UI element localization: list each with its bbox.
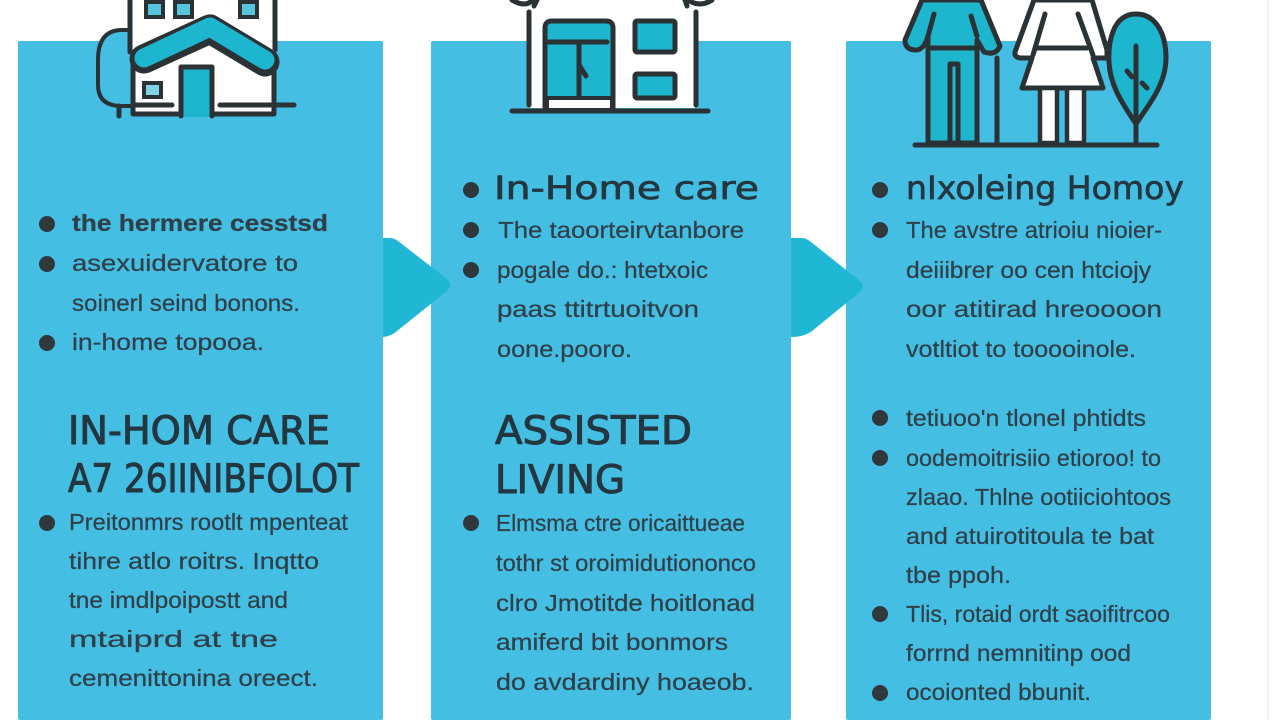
list: bottom bullets: clro Jmotitde hoitlonad bbox=[496, 590, 755, 616]
list: top bullets: oor atitirad hreoooon bbox=[906, 296, 1162, 322]
list: top bullets: nIxoleing Homoy bbox=[906, 169, 1184, 207]
list: top bullets: soinerl seind bonons. bbox=[72, 290, 300, 316]
arrow: left to middle bbox=[383, 238, 450, 337]
panel: right column bbox=[846, 0, 1211, 720]
list: bottom bullets: Elmsma ctre oricaittueae bbox=[496, 510, 745, 536]
list: top bullets: The taoorteirvtanbore bbox=[498, 217, 744, 243]
icon: people and tree bbox=[905, 0, 1166, 145]
list: top bullets bbox=[463, 169, 759, 362]
list: bottom bullets: do avdardiny hoaeob. bbox=[496, 669, 754, 695]
list: bottom bullets: Preitonmrs rootlt mpenteat bbox=[69, 509, 349, 535]
list: bottom bullets bbox=[39, 509, 349, 691]
list: top bullets bbox=[872, 169, 1184, 362]
list: top bullets: oone.pooro. bbox=[497, 336, 632, 362]
heading: in-home care: IN-HOM CARE bbox=[68, 409, 330, 454]
heading: assisted living: ASSISTED bbox=[495, 409, 692, 454]
list: bottom bullets: forrnd nemnitinp ood bbox=[906, 640, 1131, 666]
icon: modern home bbox=[512, 0, 712, 111]
list: top bullets bbox=[39, 210, 328, 355]
list: bottom bullets: amiferd bit bonmors bbox=[496, 629, 728, 655]
list: bottom bullets: tihre atlo roitrs. Inqtto bbox=[69, 548, 319, 574]
list: top bullets: The avstre atrioiu nioier- bbox=[906, 217, 1162, 243]
list: bottom bullets: zlaao. Thlne ootiiciohtoos bbox=[906, 484, 1171, 510]
list: bottom bullets: cemenittonina oreect. bbox=[69, 665, 318, 691]
list: top bullets: asexuidervatore to bbox=[72, 250, 298, 276]
list: top bullets: in-home topooa. bbox=[72, 329, 264, 355]
list: top bullets: paas ttitrtuoitvon bbox=[497, 296, 699, 322]
heading: in-home care bbox=[68, 409, 359, 502]
list: bottom bullets: tbe ppoh. bbox=[906, 562, 1011, 588]
list: bottom bullets bbox=[463, 510, 756, 695]
list: bottom bullets: mtaiprd at tne bbox=[69, 626, 278, 652]
arrow: middle to right bbox=[791, 238, 863, 337]
panel: middle column bbox=[431, 0, 791, 720]
list: top bullets: pogale do.: htetxoic bbox=[497, 257, 708, 283]
list: top bullets: In-Home care bbox=[494, 169, 759, 207]
icon: house bbox=[98, 0, 294, 117]
list: bottom bullets: tne imdlpoipostt and bbox=[69, 587, 288, 613]
list: bottom bullets: ocoionted bbunit. bbox=[906, 679, 1091, 705]
list: top bullets: votltiot to tooooinole. bbox=[906, 336, 1136, 362]
list: bottom bullets bbox=[872, 405, 1171, 705]
heading: in-home care: A7 26IINIBFOLOT bbox=[68, 457, 359, 502]
heading: assisted living: LIVING bbox=[495, 458, 625, 503]
list: top bullets: the hermere cesstsd bbox=[72, 210, 328, 236]
list: bottom bullets: Tlis, rotaid ordt saoifitrcoo bbox=[906, 601, 1170, 627]
list: bottom bullets: tothr st oroimidutiononco bbox=[496, 550, 756, 576]
panel: left column bbox=[18, 0, 383, 720]
list: bottom bullets: oodemoitrisiio etioroo! to bbox=[906, 445, 1161, 471]
list: bottom bullets: and atuirotitoula te bat bbox=[906, 523, 1155, 549]
list: top bullets: deiiibrer oo cen htciojy bbox=[906, 257, 1152, 283]
list: bottom bullets: tetiuoo'n tlonel phtidts bbox=[906, 405, 1146, 431]
heading: assisted living bbox=[495, 409, 692, 503]
